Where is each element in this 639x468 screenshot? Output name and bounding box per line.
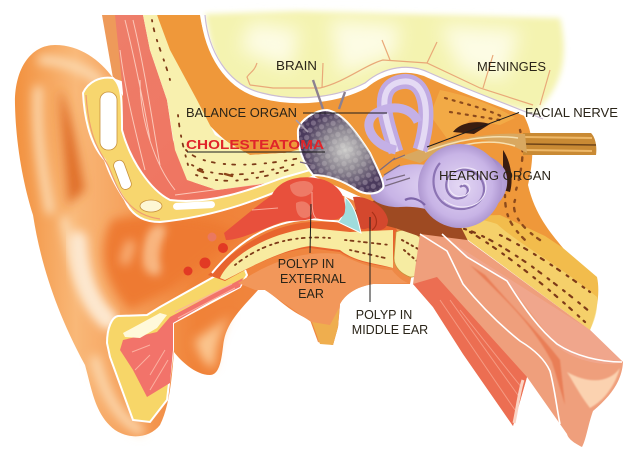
canal blood spots (184, 232, 228, 276)
label: polyp in middle ear: POLYP IN (356, 308, 412, 322)
middle ear polyp (353, 197, 388, 230)
upper bone (143, 15, 308, 190)
temple muscle (115, 15, 310, 205)
lobe cartilage and muscle (107, 257, 247, 422)
middle ear cavity (345, 195, 470, 245)
label: meninges: MENINGES (477, 59, 546, 74)
label: polyp in external ear: POLYP IN (278, 257, 334, 271)
label: polyp in middle ear: MIDDLE EAR (352, 323, 428, 337)
eardrum (338, 197, 361, 233)
label: brain: BRAIN (276, 58, 317, 73)
labels (186, 58, 618, 337)
dark cavity behind cochlea (453, 122, 512, 192)
temporal bone: orange (157, 15, 563, 250)
lower right bone (433, 215, 598, 330)
label: cholesteatoma: CHOLESTEATOMA (186, 137, 325, 152)
canal bone (208, 219, 428, 281)
label: hearing organ: HEARING ORGAN (439, 168, 551, 183)
leader lines (187, 112, 519, 302)
brain (205, 11, 564, 112)
skin strip above ear (102, 15, 124, 82)
facial nerve (400, 133, 596, 163)
ear (15, 45, 420, 436)
label: facial nerve: FACIAL NERVE (525, 105, 618, 120)
cholesteatoma mass (296, 80, 410, 194)
meninges (203, 15, 545, 121)
pharyngeal tube (413, 234, 623, 447)
right outer bone speckles (505, 130, 540, 240)
external ear flesh below canal (238, 253, 408, 345)
outer ear cartilage (83, 78, 314, 222)
label: balance organ: BALANCE ORGAN (186, 105, 297, 120)
external ear polyp (224, 177, 345, 240)
inner ear: canals, vestibule and cochlea (369, 81, 507, 228)
ear shading (60, 88, 85, 205)
label: polyp in external ear: EAR (298, 287, 324, 301)
label: polyp in external ear: EXTERNAL (280, 272, 346, 286)
